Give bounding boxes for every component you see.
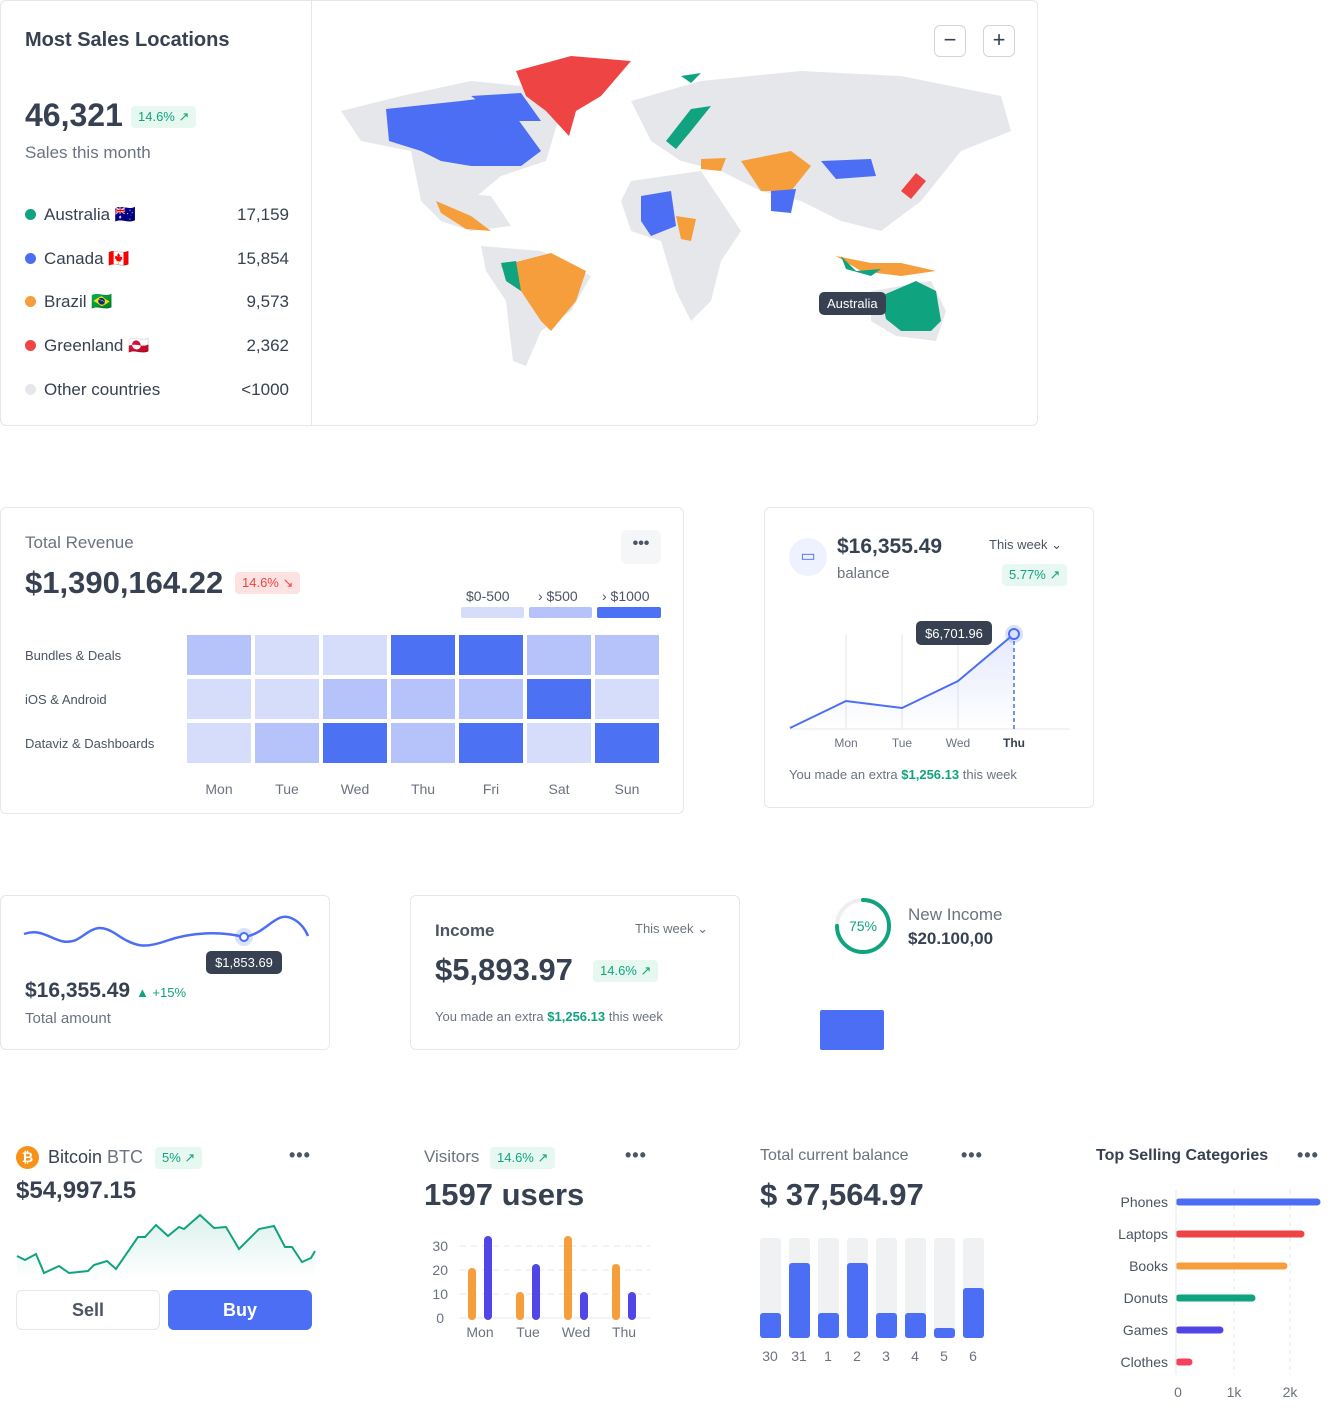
panel: total revenue: Total Revenue [25, 533, 134, 552]
zoom buttons: − [944, 27, 956, 52]
legend: $0-500 [466, 588, 510, 604]
bar chart: categories: Books [1129, 1258, 1168, 1274]
new income [835, 898, 1002, 954]
bar chart: visitors: 20 [432, 1262, 448, 1278]
bar chart: balance by day: 4 [911, 1348, 919, 1364]
panel: total revenue: ••• [633, 535, 649, 552]
list: countries: <1000 [241, 380, 289, 399]
panel: income [410, 895, 740, 1050]
line chart: balance: Tue [892, 736, 912, 750]
panel: balance [764, 507, 1094, 808]
zoom buttons: + [993, 27, 1005, 52]
panel: income: You made an extra $1,256.13 this week [435, 1009, 663, 1024]
bar chart: categories [1118, 1190, 1320, 1400]
panel: bitcoin [16, 1145, 311, 1204]
heatmap: Tue [275, 781, 299, 797]
buttons: sell / buy: Sell [72, 1300, 104, 1320]
list: countries: 15,854 [237, 249, 289, 268]
bar chart: visitors: 30 [432, 1238, 448, 1254]
icon: card [789, 538, 827, 576]
panel: bitcoin: ••• [289, 1145, 311, 1165]
panel: top selling categories: Top Selling Categories [1096, 1147, 1268, 1164]
line chart: balance [790, 621, 1070, 750]
panel: visitors: 14.6% ↗ [497, 1150, 548, 1165]
new income: $20.100,00 [908, 929, 993, 948]
panel: bitcoin: ₿ [22, 1149, 33, 1165]
panel: bitcoin: Bitcoin BTC [48, 1147, 143, 1167]
heading: most sales locations: Most Sales Locations [25, 29, 230, 51]
panel: bitcoin: $54,997.15 [16, 1177, 136, 1204]
panel: top selling categories [1096, 1145, 1319, 1165]
buttons: sell / buy [16, 1290, 312, 1330]
panel: top selling categories: ••• [1297, 1145, 1319, 1165]
heatmap: Wed [341, 781, 369, 797]
line chart: balance: Wed [946, 736, 970, 750]
tooltip: australia [819, 292, 886, 315]
metric: revenue: $1,390,164.22 [25, 565, 223, 600]
bar chart: visitors: Mon [466, 1324, 494, 1340]
panel: visitors [424, 1145, 647, 1212]
heatmap: Sun [615, 781, 639, 797]
line chart: bitcoin [16, 1214, 316, 1274]
list: countries: 9,573 [246, 292, 289, 311]
panel: most sales locations [0, 0, 1038, 426]
line chart: balance: Mon [834, 736, 858, 750]
bar chart: visitors: Thu [612, 1324, 636, 1340]
line chart: balance: Thu [1003, 736, 1025, 750]
bar chart: categories: Donuts [1124, 1290, 1168, 1306]
bar chart: balance by day: 5 [940, 1348, 948, 1364]
list: countries: Other countries [44, 380, 160, 399]
world map [341, 56, 1011, 366]
heatmap: Sat [548, 781, 570, 797]
bar chart: categories: 0 [1174, 1384, 1182, 1400]
panel: balance: $16,355.49 [837, 535, 942, 558]
legend [461, 588, 661, 618]
panel: balance: balance [837, 565, 890, 582]
new income: New Income [908, 905, 1002, 924]
list: countries: 2,362 [246, 336, 289, 355]
panel: visitors: Visitors [424, 1147, 479, 1166]
bar chart: categories: 1k [1227, 1384, 1242, 1400]
bar chart: categories: Phones [1121, 1194, 1168, 1210]
panel: total revenue: 14.6% ↘ [242, 575, 293, 590]
panel: total amount [0, 895, 330, 1050]
panel: balance: 5.77% ↗ [1009, 567, 1060, 582]
list: countries: Greenland 🇬🇱 [44, 336, 149, 355]
heatmap: Dataviz & Dashboards [25, 736, 155, 751]
bar chart: categories: Clothes [1121, 1354, 1168, 1370]
buttons: sell / buy: Buy [223, 1300, 257, 1320]
panel: total current balance: Total current balance [760, 1147, 909, 1164]
list: countries: Brazil 🇧🇷 [44, 292, 112, 311]
list: countries [25, 205, 289, 399]
metric: sales this month [25, 97, 196, 162]
bar chart: visitors: Wed [562, 1324, 590, 1340]
heatmap [25, 635, 659, 797]
metric: sales this month: 14.6% ↗ [138, 109, 189, 124]
bar chart: balance by day [760, 1238, 984, 1364]
panel: total current balance: $ 37,564.97 [760, 1177, 924, 1212]
bar chart: visitors: 0 [436, 1310, 444, 1326]
list: countries: Australia 🇦🇺 [44, 205, 136, 224]
panel: income: 14.6% ↗ [600, 963, 651, 978]
panel: bitcoin: 5% ↗ [162, 1150, 195, 1165]
zoom buttons [934, 25, 1015, 57]
heatmap: Fri [483, 781, 499, 797]
line chart: balance: $6,701.96 [925, 626, 983, 641]
tooltip: australia: Australia [827, 296, 878, 311]
icon: card: ▭ [800, 548, 816, 565]
bar chart: balance by day: 2 [853, 1348, 861, 1364]
metric: sales this month: Sales this month [25, 143, 151, 162]
panel: total revenue [0, 507, 684, 814]
list: countries: 17,159 [237, 205, 289, 224]
panel: total current balance [760, 1145, 983, 1212]
bar chart: balance by day: 3 [882, 1348, 890, 1364]
panel: balance: You made an extra $1,256.13 this week [789, 767, 1017, 782]
new income: 75% [849, 918, 877, 934]
metric: sales this month: 46,321 [25, 97, 123, 133]
panel: income: $5,893.97 [435, 952, 573, 987]
bar chart: balance by day: 6 [969, 1348, 977, 1364]
bar chart: visitors: 10 [432, 1286, 448, 1302]
heatmap: Thu [411, 781, 435, 797]
panel: visitors: ••• [625, 1145, 647, 1165]
bar chart: balance by day: 31 [791, 1348, 807, 1364]
heatmap: iOS & Android [25, 692, 107, 707]
legend: › $1000 [602, 588, 649, 604]
heatmap: Bundles & Deals [25, 648, 122, 663]
panel: income: Income [435, 921, 495, 940]
bar chart: visitors [432, 1236, 650, 1340]
panel: total amount: Total amount [25, 1010, 111, 1027]
heatmap: Mon [205, 781, 233, 797]
panel: total amount: $1,853.69 [215, 955, 273, 970]
list: countries: Canada 🇨🇦 [44, 249, 129, 268]
bar chart: categories: Laptops [1118, 1226, 1168, 1242]
legend: › $500 [538, 588, 578, 604]
panel: balance: This week ⌄ [989, 537, 1062, 552]
bar chart: balance by day: 30 [762, 1348, 778, 1364]
bar chart: balance by day: 1 [824, 1348, 832, 1364]
panel: visitors: 1597 users [424, 1177, 584, 1212]
bar chart: visitors: Tue [516, 1324, 540, 1340]
panel: income: This week ⌄ [635, 921, 708, 936]
panel: total amount: $16,355.49 ▲ +15% [25, 979, 186, 1002]
bar chart: categories: Games [1123, 1322, 1168, 1338]
blue block [820, 1010, 884, 1050]
panel: total current balance: ••• [961, 1145, 983, 1165]
bar chart: categories: 2k [1283, 1384, 1298, 1400]
